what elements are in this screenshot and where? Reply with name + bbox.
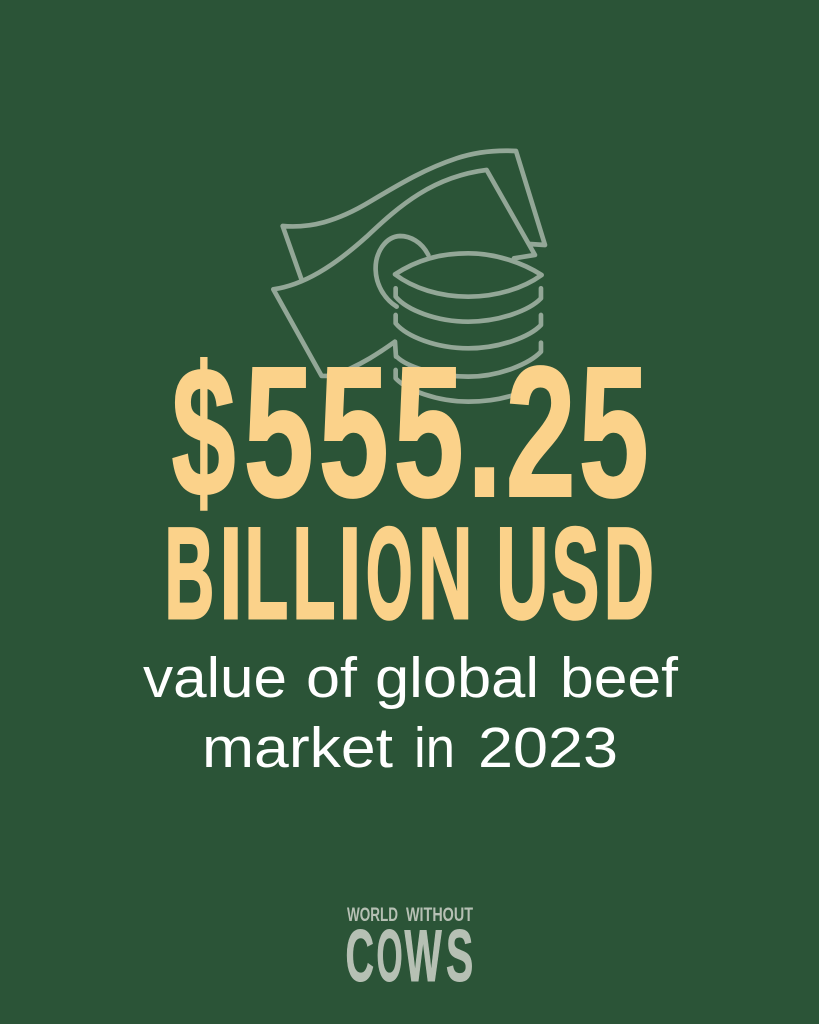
headline figure: 5 <box>394 328 464 536</box>
headline unit: D <box>604 502 654 647</box>
logo: World Without Cows: C <box>346 916 374 997</box>
headline unit <box>164 501 654 647</box>
headline figure <box>172 328 649 536</box>
headline unit: L <box>244 502 288 647</box>
logo: World Without Cows: O <box>376 917 403 998</box>
headline figure: . <box>467 328 502 536</box>
headline figure: 5 <box>318 328 389 536</box>
headline figure: $ <box>172 328 236 536</box>
headline figure: 5 <box>578 328 649 536</box>
headline unit: S <box>552 502 599 647</box>
description text: 2023 <box>478 716 618 780</box>
headline unit: I <box>338 502 361 647</box>
headline unit: N <box>418 501 472 646</box>
icon: banknotes and coin stack <box>273 151 545 402</box>
headline figure: 5 <box>244 328 314 536</box>
headline unit: L <box>292 501 335 647</box>
headline unit: I <box>220 502 242 647</box>
description text: in <box>414 716 455 780</box>
description text: market <box>202 716 393 780</box>
logo: World Without Cows: WITHOUT <box>406 905 473 926</box>
description text: global <box>375 646 539 710</box>
description text: value <box>143 646 287 710</box>
description text: beef <box>560 646 678 710</box>
headline figure: 2 <box>506 328 576 536</box>
logo: World Without Cows: WORLD <box>347 905 398 926</box>
logo: World Without Cows: W <box>404 916 442 997</box>
headline unit: B <box>164 502 214 647</box>
headline unit: U <box>496 502 548 647</box>
description text: of <box>306 646 357 710</box>
headline unit: O <box>366 501 413 646</box>
logo: World Without Cows: S <box>446 914 473 997</box>
description text <box>143 646 678 780</box>
logo: World Without Cows <box>346 905 473 998</box>
